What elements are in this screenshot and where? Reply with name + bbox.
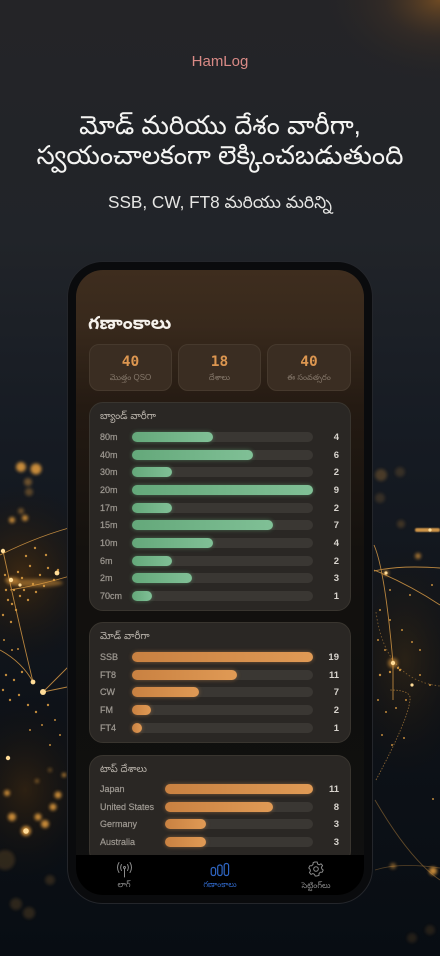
stat card: total QSO: 40 [122, 354, 139, 370]
icon: bar chart [210, 862, 230, 876]
panel: top countries [89, 755, 351, 865]
bar row: 70cm: 70cm [100, 591, 122, 601]
bar row: Germany: Germany [100, 819, 137, 829]
bar row: 2m [100, 570, 339, 586]
bar row: FT4 [100, 721, 339, 735]
bar row: 20m: 20m [100, 485, 118, 495]
bar row: FT4: 1 [334, 723, 339, 734]
screen heading: గణాంకాలు [88, 312, 171, 333]
bar row: CW: 7 [334, 687, 339, 698]
bar row: 17m: 17m [100, 503, 118, 513]
phone mockup [67, 261, 373, 904]
bar row: FM [100, 702, 339, 718]
bar row: Japan: 11 [329, 784, 339, 795]
panel: by mode [89, 622, 351, 743]
bar row: FT8: 11 [329, 670, 339, 681]
phone screen [76, 270, 364, 895]
nav item: log [117, 862, 132, 889]
bar row: 80m: 80m [100, 432, 118, 442]
bar row: 30m: 2 [334, 467, 339, 478]
bar row: 15m [100, 518, 339, 532]
stat card: countries: దేశాలు [209, 373, 230, 382]
bar row: SSB [100, 650, 339, 664]
bar row: 6m [100, 554, 339, 568]
bar row: 6m: 2 [334, 556, 339, 567]
bar row: 15m: 15m [100, 520, 118, 530]
stat card: this year [267, 344, 351, 391]
headline [37, 110, 403, 173]
bar row: FM: FM [100, 705, 113, 715]
bar row: Germany [100, 816, 339, 832]
label: log: లాగ్ [117, 880, 131, 889]
bar row: SSB: 19 [328, 652, 339, 663]
stat card: this year: 40 [300, 354, 318, 370]
bar row: 20m: 9 [334, 485, 339, 496]
headline: మోడ్ మరియు దేశం వారీగా, [79, 110, 361, 140]
icon: antenna [117, 862, 132, 878]
bar row: FT4: FT4 [100, 723, 116, 733]
bar row: 17m: 2 [334, 503, 339, 514]
bar row: CW: CW [100, 687, 115, 697]
bar row: Japan [100, 782, 339, 796]
label: settings: సెట్టింగ్‌లు [302, 881, 330, 890]
bar row: FM: 2 [334, 705, 339, 716]
bar row: 20m [100, 482, 339, 498]
bar row: Australia: Australia [100, 837, 135, 847]
mode panel heading: మోడ్ వారీగా [100, 631, 150, 642]
bar row: 40m [100, 448, 339, 462]
subtitle: SSB, CW, FT8 మరియు మరిన్ని [108, 192, 332, 212]
bar row: 40m: 40m [100, 450, 118, 460]
bar row: CW [100, 684, 339, 700]
stat card: total QSO [89, 344, 172, 391]
band panel heading: బ్యాండ్ వారీగా [100, 411, 156, 422]
bar row: 17m [100, 500, 339, 516]
stat card: countries [178, 344, 261, 391]
bar row: FT8: FT8 [100, 670, 116, 680]
nav item: statistics (active) [203, 862, 237, 889]
bar row: 10m [100, 536, 339, 550]
bar row: 80m [100, 430, 339, 444]
bar row: 10m: 10m [100, 538, 118, 548]
bar row: Germany: 3 [334, 819, 339, 830]
bar row: FT8 [100, 668, 339, 682]
bar row: 30m [100, 464, 339, 480]
bar row: Australia [100, 834, 339, 850]
bar row: United States [100, 800, 339, 814]
bar row: 80m: 4 [334, 432, 339, 443]
bar row: Australia: 3 [334, 837, 339, 848]
bar row: 70cm [100, 588, 339, 604]
bar row: 15m: 7 [334, 520, 339, 531]
bar row: Japan: Japan [100, 784, 125, 794]
bar row: 2m: 2m [100, 573, 113, 583]
label: statistics: గణాంకాలు [203, 880, 237, 889]
bottom navigation bar [76, 855, 364, 895]
bar row: 70cm: 1 [334, 591, 339, 602]
bar row: 40m: 6 [334, 450, 339, 461]
bar row: 10m: 4 [334, 538, 339, 549]
countries panel heading: టాప్ దేశాలు [100, 764, 147, 775]
stat card: this year: ఈ సంవత్సరం [287, 373, 331, 382]
bar row: United States: 8 [334, 802, 339, 813]
bar row: 6m: 6m [100, 556, 113, 566]
bar row: United States: United States [100, 802, 154, 812]
bar row: 2m: 3 [334, 573, 339, 584]
nav item: settings [301, 862, 330, 892]
app name: HamLog [192, 53, 248, 70]
icon: gear [308, 862, 324, 876]
panel: by band [89, 402, 351, 611]
stat card: countries: 18 [211, 354, 228, 370]
bar row: 30m: 30m [100, 467, 118, 477]
headline: స్వయంచాలకంగా లెక్కించబడుతుంది [37, 140, 403, 170]
stat card: total QSO: మొత్తం QSO [110, 373, 151, 382]
bar row: SSB: SSB [100, 652, 118, 662]
